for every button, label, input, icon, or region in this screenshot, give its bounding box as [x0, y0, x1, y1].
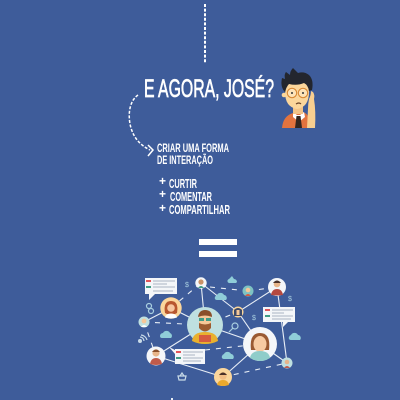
avatar: top woman — [195, 277, 207, 289]
list: actions — [159, 174, 230, 217]
title: E AGORA, JOSÉ? — [144, 74, 274, 103]
avatar: teal small man — [242, 286, 254, 296]
icons: clouds — [160, 276, 301, 359]
avatar: man left lower — [146, 346, 166, 366]
equals sign — [199, 239, 237, 257]
avatar: woman with buns — [160, 297, 182, 319]
dashed curved arrow — [129, 95, 153, 156]
list: actions: + — [159, 201, 166, 215]
avatar: top right man — [268, 278, 286, 296]
icons: dollar signs: $ — [252, 315, 256, 322]
dashed connector line — [204, 4, 206, 63]
speech card 1 — [145, 278, 177, 300]
avatar: small orange — [232, 306, 244, 318]
icon: worried man — [281, 68, 315, 128]
network connections — [144, 283, 287, 377]
avatar: large bearded man — [187, 307, 223, 344]
speech card 2 — [169, 347, 205, 364]
avatar: small man left — [138, 316, 150, 328]
list: actions: CURTIR — [169, 177, 197, 191]
text: criar uma forma de interação — [157, 141, 229, 167]
avatar: large woman — [243, 327, 277, 361]
list: actions: + — [159, 174, 166, 188]
network illustration — [138, 276, 301, 400]
icon: link chain — [146, 304, 154, 314]
avatar: lower orange man — [214, 368, 232, 386]
icons: dollar signs: $ — [288, 296, 292, 303]
list: actions: COMENTAR — [170, 190, 212, 204]
icons: dollar signs: $ — [185, 282, 189, 289]
list: actions: COMPARTILHAR — [169, 203, 230, 217]
icon: basket — [178, 373, 186, 380]
avatar: small right — [282, 358, 292, 368]
text: criar uma forma de interação: DE INTERAÇÃO — [157, 152, 213, 167]
icon: magnifier — [229, 323, 238, 332]
icons: dollar signs — [185, 282, 292, 322]
list: actions: + — [159, 187, 166, 201]
text: criar uma forma de interação: CRIAR UMA FORMA — [157, 141, 229, 155]
speech card 3 — [263, 307, 295, 327]
bottom mark — [171, 398, 173, 400]
icon: wifi signal — [139, 335, 147, 342]
